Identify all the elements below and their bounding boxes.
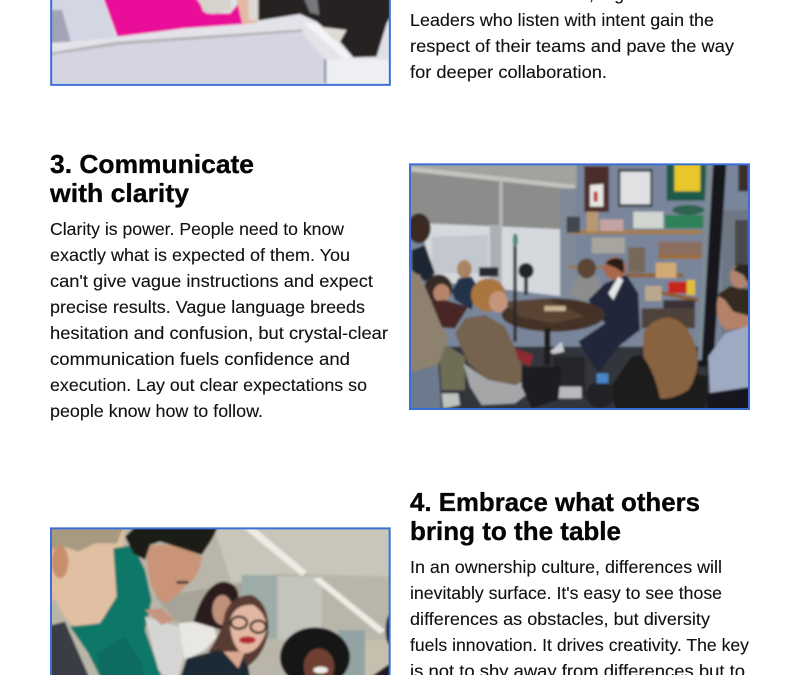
heading: 3. Communicate with clarity: with clarity — [49, 178, 190, 208]
body text: section 4: inevitably surface. It's easy to see those — [410, 583, 722, 603]
body text: section 3: execution. Lay out clear expectations so — [50, 375, 367, 395]
photo: smiling colleagues gathered at work — [45, 520, 395, 675]
heading: 4. Embrace what others bring to the table: bring to the table — [410, 516, 621, 546]
body text: end of section 2: for deeper collaboration. — [410, 62, 607, 82]
body text: end of section 2: Leaders who listen with intent gain the — [410, 10, 714, 30]
body text: section 4: differences as obstacles, but diversity — [410, 609, 710, 629]
body text: end of section 2 — [410, 0, 734, 82]
body text: section 3: communication fuels confidence and — [50, 349, 350, 369]
heading: 3. Communicate with clarity — [49, 149, 254, 208]
body text: section 3: precise results. Vague language breeds — [50, 297, 365, 317]
body text: section 3: people know how to follow. — [50, 401, 263, 421]
heading: 4. Embrace what others bring to the table — [410, 487, 700, 546]
photo: two people seated on a white sofa — [50, 0, 391, 87]
body text: section 4: In an ownership culture, differences will — [410, 557, 722, 577]
body text: section 3: can't give vague instructions and expect — [50, 271, 373, 291]
body text: section 4: fuels innovation. It drives creativity. The key — [410, 635, 749, 655]
heading: 3. Communicate with clarity: 3. Communicate — [50, 149, 254, 179]
body text: end of section 2: respect of their teams and pave the way — [410, 36, 734, 56]
body text: section 3: Clarity is power. People need to know — [50, 219, 344, 239]
photo: podcast meeting around a table in an office — [405, 160, 755, 413]
body text: section 3: hesitation and confusion, but crystal-clear — [50, 323, 388, 343]
body text: section 3 — [50, 219, 388, 421]
body text: section 3: exactly what is expected of them. You — [50, 245, 350, 265]
body text: section 4 — [410, 557, 749, 675]
heading: 4. Embrace what others bring to the table: 4. Embrace what others — [410, 487, 700, 517]
